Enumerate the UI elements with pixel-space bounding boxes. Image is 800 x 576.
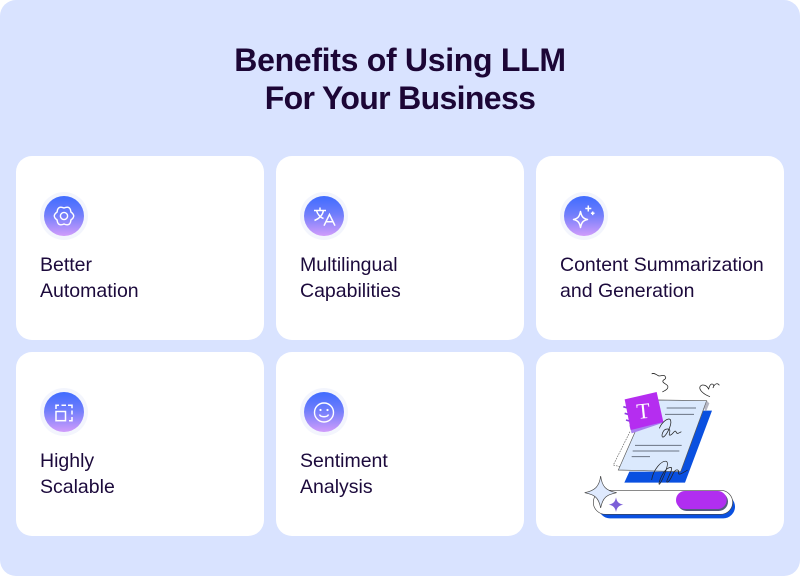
icon: smile bbox=[300, 388, 348, 436]
illustration: document with slider: T bbox=[635, 398, 652, 424]
label bbox=[40, 450, 115, 498]
label: and Generation bbox=[560, 280, 694, 302]
label: Analysis bbox=[300, 476, 373, 498]
title bbox=[234, 42, 566, 116]
label: Content Summarization bbox=[560, 254, 764, 276]
label: Scalable bbox=[40, 476, 115, 498]
label: Sentiment bbox=[300, 450, 388, 472]
panel: sentiment analysis bbox=[276, 352, 524, 536]
icon: sparkles bbox=[560, 192, 608, 240]
panel: better automation bbox=[16, 156, 264, 340]
icon: scale bbox=[40, 388, 88, 436]
label: Automation bbox=[40, 280, 139, 302]
icon: gear bbox=[40, 192, 88, 240]
panel: content summarization bbox=[536, 156, 784, 340]
panel: multilingual capabilities bbox=[276, 156, 524, 340]
label bbox=[560, 254, 764, 302]
label bbox=[40, 254, 139, 302]
title: Benefits of Using LLM bbox=[234, 42, 566, 78]
panel: highly scalable bbox=[16, 352, 264, 536]
title: For Your Business bbox=[265, 80, 535, 116]
icon: translate bbox=[300, 192, 348, 240]
panel: illustration card bbox=[536, 352, 784, 536]
label: Multilingual bbox=[300, 254, 398, 276]
label bbox=[300, 254, 401, 302]
label: Better bbox=[40, 254, 92, 276]
label: Capabilities bbox=[300, 280, 401, 302]
label bbox=[300, 450, 388, 498]
label: Highly bbox=[40, 450, 94, 472]
illustration: document with slider bbox=[584, 373, 735, 518]
